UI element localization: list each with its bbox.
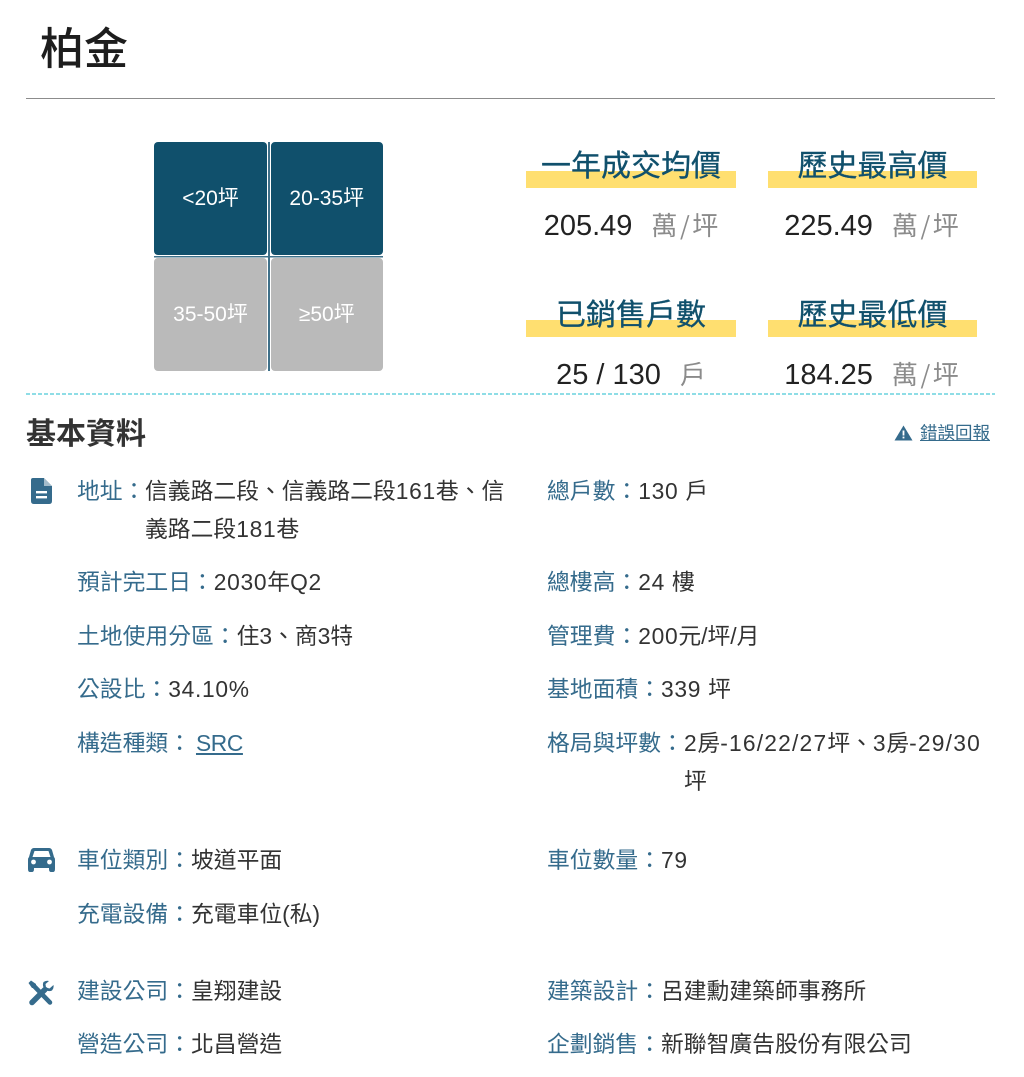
info: layouts and sizes: 2房-16/22/27坪、3房-29/30 <box>684 730 981 756</box>
info: total units: 總戶數：130 戶 <box>547 478 708 504</box>
info: land use zone: 土地使用分區：住3、商3特 <box>77 623 353 649</box>
info: contractor: 營造公司：北昌營造 <box>77 1031 282 1057</box>
size cell: over 50 ping <box>271 258 382 371</box>
highlight bar <box>768 320 977 337</box>
info: structure type: 構造種類：SRC <box>77 730 243 756</box>
stat: historic high price <box>768 150 977 243</box>
stat value: 225.49 萬/坪 <box>784 207 959 243</box>
info: completion date: 預計完工日：2030年Q2 <box>77 569 322 595</box>
stat heading: 歷史最低價 <box>798 299 948 332</box>
icon: document <box>31 478 52 504</box>
info: architect: 建築設計：呂建勳建築師事務所 <box>547 978 866 1004</box>
title: 柏金 <box>40 25 128 74</box>
info: public ratio: 公設比：34.10% <box>77 676 250 702</box>
info: address: 地址： <box>77 478 145 504</box>
info: site area: 基地面積：339 坪 <box>547 676 731 702</box>
size cell: under 20 ping: <20坪 <box>182 187 239 210</box>
info: charging equipment: 充電設備：充電車位(私) <box>77 901 320 927</box>
stat: one year average price <box>526 150 736 243</box>
info: sales agent: 企劃銷售：新聯智廣告股份有限公司 <box>547 1031 912 1057</box>
size cell: 20 to 35 ping: 20-35坪 <box>289 187 364 210</box>
info: address: 義路二段181巷 <box>145 516 299 542</box>
info: developer: 建設公司：皇翔建設 <box>77 978 282 1004</box>
info: layouts and sizes <box>547 730 981 794</box>
info: layouts and sizes: 坪 <box>684 768 707 794</box>
stat value: 205.49 萬/坪 <box>544 207 718 243</box>
size cell: 20 to 35 ping <box>271 142 382 255</box>
info: parking count: 車位數量：79 <box>547 847 688 873</box>
highlight bar <box>526 320 736 337</box>
stat: historic low price <box>768 299 977 392</box>
size cell: 35 to 50 ping <box>154 258 267 371</box>
info: total floors: 總樓高：24 樓 <box>547 569 695 595</box>
highlight bar <box>768 171 977 188</box>
header divider <box>26 98 995 99</box>
stat value: 25 / 130 戶 <box>556 359 706 391</box>
info: parking type: 車位類別：坡道平面 <box>77 847 282 873</box>
size cell: 35 to 50 ping: 35-50坪 <box>173 303 248 326</box>
icon: warning triangle <box>894 426 912 440</box>
info: management fee: 管理費：200元/坪/月 <box>547 623 759 649</box>
dashed section divider <box>26 393 995 394</box>
icon: car <box>28 848 55 872</box>
info: address <box>77 478 504 542</box>
info: address: 信義路二段、信義路二段161巷、信 <box>145 478 504 504</box>
report text: 錯誤回報 <box>920 423 990 443</box>
size grid panel <box>154 142 382 370</box>
error report link <box>894 423 990 443</box>
info: layouts and sizes: 格局與坪數： <box>547 730 684 756</box>
section heading: 基本資料 <box>26 418 146 451</box>
icon: tools <box>28 980 54 1006</box>
highlight bar <box>526 171 736 188</box>
stat: units sold <box>526 299 736 391</box>
stat value: 184.25 萬/坪 <box>784 356 959 392</box>
size cell: over 50 ping: ≥50坪 <box>299 303 355 326</box>
size cell: under 20 ping <box>154 142 267 255</box>
stat heading: 歷史最高價 <box>798 150 948 183</box>
stat heading: 一年成交均價 <box>541 150 721 183</box>
stat heading: 已銷售戶數 <box>556 299 706 332</box>
